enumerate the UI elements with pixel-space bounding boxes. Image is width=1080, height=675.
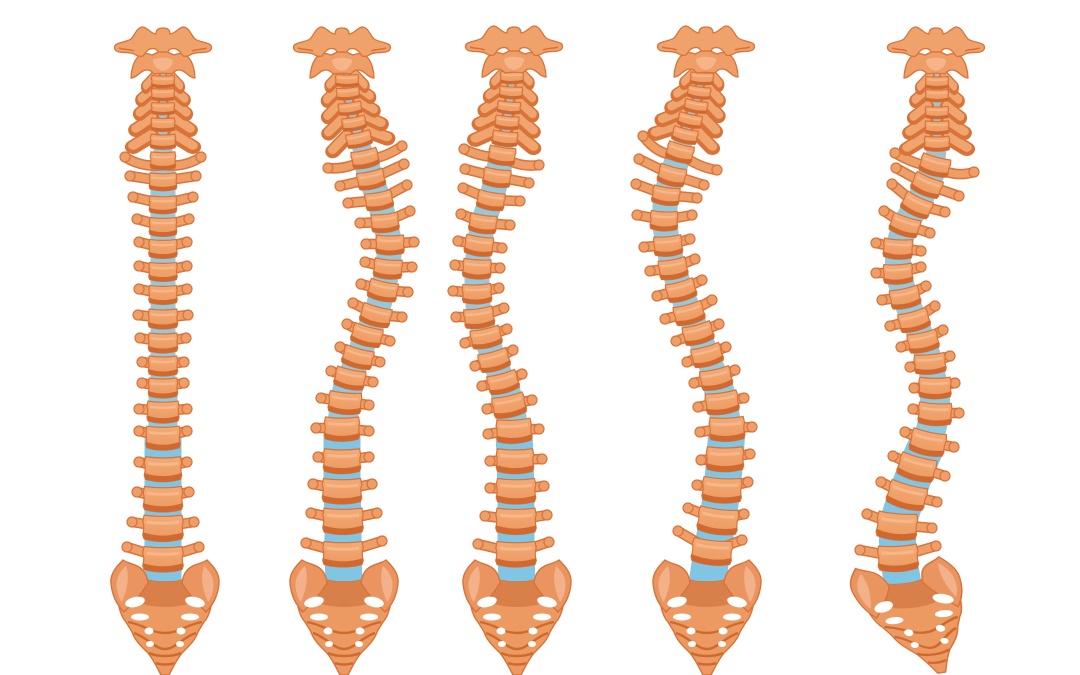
pelvis and sacrum 5 [844,555,995,675]
intervertebral discs 5 [897,72,937,584]
pelvis and sacrum 4 [653,560,761,675]
intervertebral discs 3 [477,70,517,584]
atlas and axis 5 [888,27,984,78]
spine 5: double S-curve with tilted pelvis [844,27,995,675]
pelvis and sacrum 3 [463,560,571,675]
cervical vertebrae 3 [475,70,535,148]
spine 1: normal straight spine [111,27,219,675]
pelvis and sacrum 2 [290,560,398,675]
transverse processes 3 [453,149,549,553]
vertebrae 3 [462,145,536,567]
intervertebral discs 4 [664,70,727,584]
transverse processes 5 [860,153,974,557]
cervical vertebrae 4 [655,71,721,148]
atlas and axis 1 [115,27,211,78]
transverse processes 2 [306,146,414,553]
transverse processes 4 [636,136,752,551]
pelvis and sacrum 1 [111,560,219,675]
spine 2: scoliosis curving right then left [290,27,414,675]
spine 4: scoliosis curving left with long lumbar sweep [636,26,761,675]
vertebrae 5 [876,153,952,573]
vertebrae 2 [322,147,404,567]
spine 3: scoliosis curving left [453,26,571,675]
intervertebral discs 1 [154,72,172,584]
transverse processes 1 [125,157,201,558]
atlas and axis 3 [466,26,562,77]
atlas and axis 2 [294,27,390,78]
vertebrae 4 [650,141,745,567]
vertebrae 1 [143,152,183,572]
cervical vertebrae 1 [133,74,193,149]
intervertebral discs 2 [342,72,390,584]
cervical vertebrae 2 [326,74,388,151]
atlas and axis 4 [658,26,754,77]
cervical vertebrae 5 [907,76,967,151]
